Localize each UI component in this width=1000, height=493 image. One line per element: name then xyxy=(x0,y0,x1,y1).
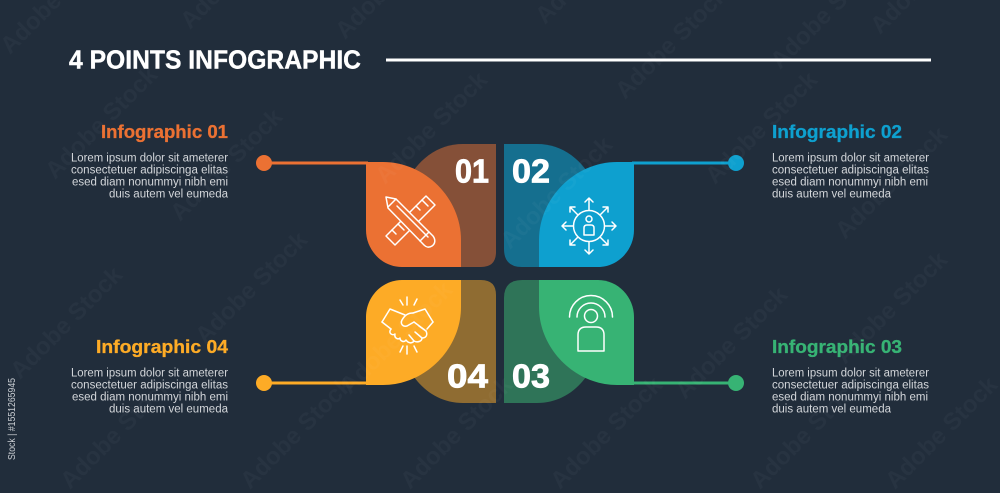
text 04: consectetuer adipiscinga elitas xyxy=(71,380,228,392)
text 04: Lorem ipsum dolor sit ameterer xyxy=(71,368,228,380)
watermark: Adobe Stock xyxy=(190,226,313,349)
watermark: Adobe Stock xyxy=(700,66,823,189)
icon: person with signal xyxy=(570,296,612,351)
text 03: esed diam nonummyi nibh emi xyxy=(772,392,928,404)
number 01: 01 xyxy=(455,152,489,190)
back leaf 02 xyxy=(504,144,595,267)
text 01: esed diam nonummyi nibh emi xyxy=(72,176,228,188)
connector and dot 02 xyxy=(632,155,744,171)
text 01: duis autem vel eumeda xyxy=(109,188,229,200)
panel: point 03 xyxy=(504,280,929,416)
front leaf 04 xyxy=(366,280,461,385)
connector and dot 04 xyxy=(256,375,368,391)
heading 03: Infographic 03 xyxy=(772,336,902,357)
number 02: 02 xyxy=(512,152,550,190)
text 04: esed diam nonummyi nibh emi xyxy=(72,392,228,404)
front leaf 03 xyxy=(539,280,634,385)
title rule xyxy=(386,58,931,62)
back leaf 03 xyxy=(504,280,595,403)
watermark: Adobe Stock xyxy=(745,371,868,493)
panel: point 02 xyxy=(504,121,929,267)
panel: point 01 xyxy=(71,121,496,267)
watermark: Adobe Stock xyxy=(165,103,288,226)
watermark: Adobe Stock xyxy=(40,61,163,184)
watermark: Adobe Stock xyxy=(335,276,458,399)
connector and dot 01 xyxy=(256,155,368,171)
text 03: duis autem vel eumeda xyxy=(772,404,892,416)
text 03: consectetuer adipiscinga elitas xyxy=(772,380,929,392)
back leaf 01 xyxy=(405,144,496,267)
text 02: duis autem vel eumeda xyxy=(772,188,892,200)
icon: handshake xyxy=(382,297,433,354)
front leaf 02 xyxy=(539,162,634,267)
text 02: esed diam nonummyi nibh emi xyxy=(772,176,928,188)
watermark: Adobe Stock xyxy=(370,66,493,189)
icon: pencil and ruler xyxy=(386,196,435,247)
watermark: Adobe Stock xyxy=(495,131,618,254)
text 03: Lorem ipsum dolor sit ameterer xyxy=(772,368,929,380)
icon: person with outward arrows xyxy=(562,198,616,254)
heading 01: Infographic 01 xyxy=(101,121,228,142)
number 03: 03 xyxy=(512,358,550,394)
watermark: Adobe Stock xyxy=(830,246,953,369)
text 03 xyxy=(772,368,929,416)
watermark: Adobe Stock xyxy=(545,371,668,493)
watermark: Adobe Stock xyxy=(235,371,358,493)
text 04: duis autem vel eumeda xyxy=(109,404,229,416)
watermark: Adobe Stock xyxy=(55,371,178,493)
watermark: Adobe Stock xyxy=(395,371,518,493)
panel: point 04 xyxy=(71,280,496,416)
watermark: Adobe Stock xyxy=(670,281,793,404)
back leaf 04 xyxy=(405,280,496,403)
text 02: Lorem ipsum dolor sit ameterer xyxy=(772,152,929,164)
text 01: Lorem ipsum dolor sit ameterer xyxy=(71,152,228,164)
text 01 xyxy=(71,152,229,200)
text 01: consectetuer adipiscinga elitas xyxy=(71,164,228,176)
number 04: 04 xyxy=(447,358,489,394)
connector and dot 03 xyxy=(632,375,744,391)
title: 4 POINTS INFOGRAPHIC xyxy=(69,44,361,74)
front leaf 01 xyxy=(366,162,461,267)
watermark: Adobe Stock xyxy=(5,261,128,384)
text 04 xyxy=(71,368,229,416)
stock id: Stock | #1551265945 xyxy=(7,378,18,460)
text 02 xyxy=(772,152,929,200)
heading 02: Infographic 02 xyxy=(772,121,902,142)
heading 04: Infographic 04 xyxy=(96,336,229,357)
watermark: Adobe Stock xyxy=(830,121,953,244)
text 02: consectetuer adipiscinga elitas xyxy=(772,164,929,176)
